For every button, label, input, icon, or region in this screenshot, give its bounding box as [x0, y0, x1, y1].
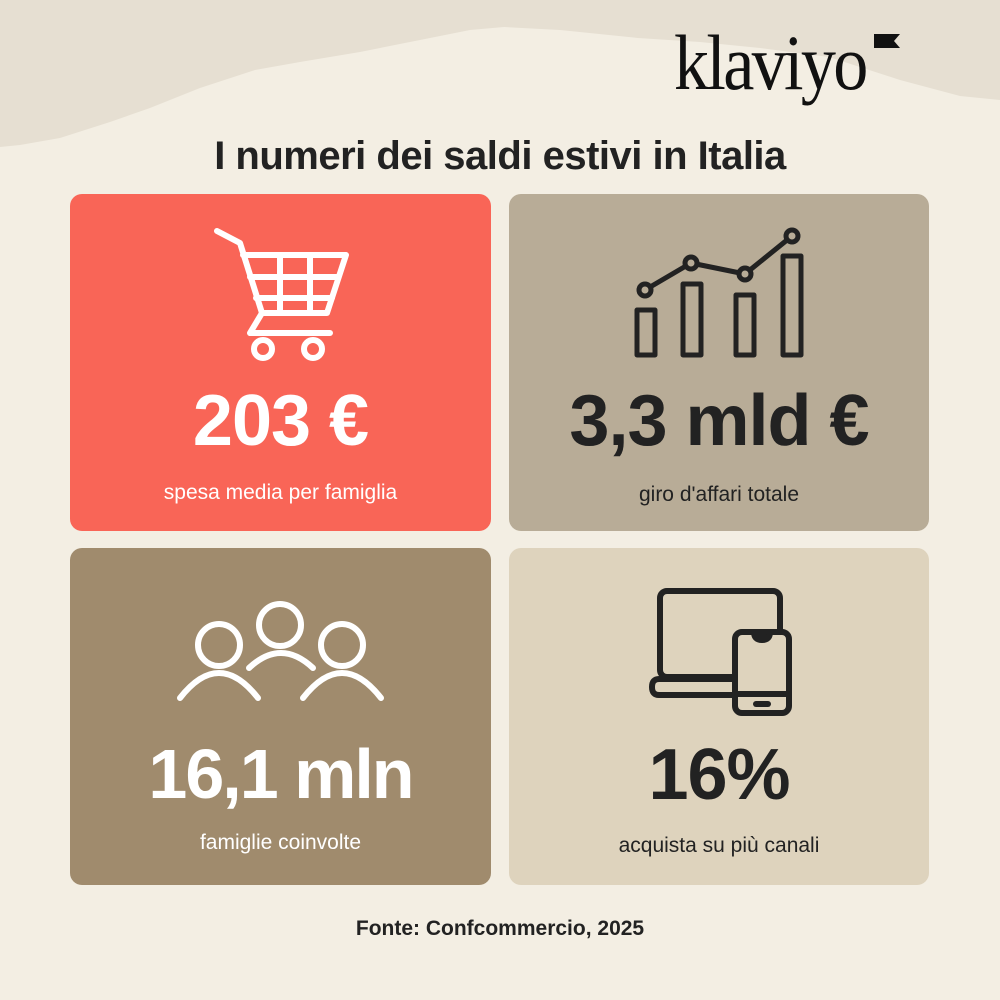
label: famiglie coinvolte	[200, 831, 361, 854]
panel: giro d'affari	[509, 194, 929, 531]
logo: klaviyo: klaviyo	[674, 19, 866, 106]
stat: 16%: 16%	[648, 735, 790, 815]
label: spesa media per famiglia	[164, 481, 397, 504]
stat: 203 €: 203 €	[193, 381, 368, 461]
icon: bar chart with line	[634, 228, 804, 358]
source note: Fonte: Confcommercio, 2025	[356, 917, 644, 940]
label: acquista su più canali	[619, 834, 819, 857]
title: I numeri dei saldi estivi in Italia	[214, 134, 786, 178]
label: giro d'affari totale	[639, 483, 799, 506]
stat: 16,1 mln: 16,1 mln	[148, 735, 413, 813]
panel: multicanale	[509, 548, 929, 885]
stat: 3,3 mld €: 3,3 mld €	[569, 381, 869, 461]
icon: shopping cart	[214, 228, 349, 361]
panel: spesa media	[70, 194, 491, 531]
panel: famiglie	[70, 548, 491, 885]
icon: people	[177, 601, 384, 701]
icon: laptop and phone	[649, 588, 792, 716]
